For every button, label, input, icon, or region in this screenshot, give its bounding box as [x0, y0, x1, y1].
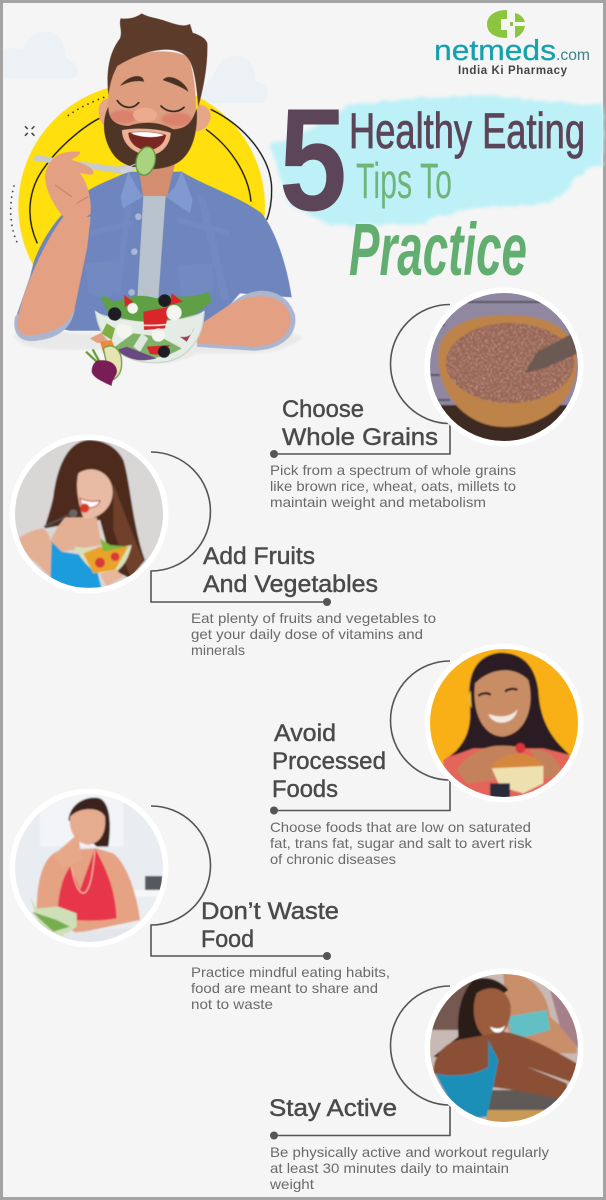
heading [201, 898, 339, 953]
description [270, 462, 516, 510]
description: get your daily dose of vitamins and [191, 626, 423, 642]
description [191, 964, 390, 1012]
ears [99, 98, 211, 132]
hair [108, 13, 207, 107]
description: Choose foods that are low on saturated [270, 819, 531, 835]
head [99, 13, 211, 169]
title block [270, 78, 603, 291]
connector [270, 304, 450, 458]
neck [137, 157, 177, 198]
description: of chronic diseases [270, 851, 396, 867]
photo: woman with fruit bowl [10, 434, 170, 594]
t-shirt [137, 196, 166, 298]
heading: Food [201, 926, 254, 953]
heading [272, 720, 386, 803]
jacket pockets [85, 193, 230, 302]
logo .com: .com [556, 47, 590, 64]
buttons [128, 213, 142, 296]
heading: Choose [282, 396, 364, 423]
illustration: man eating salad [3, 13, 303, 386]
panel: whole grains [270, 288, 585, 510]
heading [282, 396, 438, 451]
description: food are meant to share and [191, 980, 378, 996]
panel: fruits and vegetables [10, 434, 436, 658]
description: Eat plenty of fruits and vegetables to [191, 610, 436, 626]
heading: Foods [272, 776, 338, 803]
decorative dots [11, 97, 104, 245]
closed eyes [117, 101, 184, 111]
description [270, 819, 533, 867]
hand holding fork [33, 151, 147, 220]
nose [133, 108, 157, 122]
heading: Whole Grains [282, 424, 438, 451]
olives [108, 294, 171, 358]
logo wordmark: netmeds [434, 35, 556, 67]
face [107, 51, 196, 160]
table shadow [13, 330, 303, 363]
description: like brown rice, wheat, oats, millets to [270, 478, 516, 494]
title line: Tips To: Tips To [356, 153, 452, 209]
heading: And Vegetables [203, 571, 378, 598]
photo: woman thinking at table [10, 788, 170, 948]
logo: netmeds [434, 10, 590, 77]
panel: don't waste food [10, 788, 390, 1012]
description: maintain weight and metabolism [270, 494, 486, 510]
beard [104, 107, 197, 169]
panel: stay active [269, 968, 584, 1192]
photo: woman exercising [423, 968, 584, 1128]
bowl rim [96, 312, 204, 325]
mouth [122, 129, 171, 155]
description: not to waste [191, 996, 273, 1012]
left arm with sleeve [14, 300, 75, 341]
heading: Don’t Waste [201, 898, 339, 925]
description [269, 1144, 549, 1192]
connector [270, 986, 450, 1140]
description: weight [269, 1176, 314, 1192]
photo: girl with burger [423, 643, 584, 802]
connector [151, 452, 331, 606]
description: Practice mindful eating habits, [191, 964, 390, 980]
heading: Stay Active [269, 1095, 397, 1122]
hand behind bowl [90, 332, 110, 343]
jacket [15, 172, 292, 331]
black ring arcs [30, 109, 272, 243]
right arm with sleeve [197, 291, 295, 351]
heading [203, 543, 378, 598]
description: Pick from a spectrum of whole grains [270, 462, 516, 478]
big number 5: 5 [279, 78, 347, 241]
salad bowl [90, 292, 212, 363]
connector [151, 806, 331, 960]
description: at least 30 minutes daily to maintain [270, 1160, 509, 1176]
bowl glass [96, 312, 204, 363]
heading: Add Fruits [203, 543, 315, 570]
description: Be physically active and workout regularly [270, 1144, 549, 1160]
photo: bowl of grains [424, 288, 585, 446]
cheek blush [109, 110, 192, 126]
cheese [116, 303, 182, 352]
yellow sun circle [18, 83, 265, 330]
description: minerals [191, 642, 245, 658]
eyebrows [120, 76, 188, 92]
heading: Avoid [274, 720, 336, 747]
collar [121, 171, 193, 213]
heading: Processed [272, 748, 386, 775]
logo icon [487, 10, 525, 38]
icon: left cloud [3, 31, 77, 78]
vegetables: carrot and beetroot [86, 323, 122, 386]
panel: processed foods [270, 643, 584, 867]
cyan brush splash [270, 95, 603, 225]
connector [270, 661, 450, 814]
tomatoes [124, 293, 183, 355]
logo tagline: India Ki Pharmacy [458, 65, 568, 77]
cucumber slice [133, 145, 158, 177]
fork tines [120, 159, 147, 173]
description: fat, trans fat, sugar and salt to avert risk [270, 835, 533, 851]
description [191, 610, 436, 658]
icon: right cloud [202, 56, 268, 103]
salad leaves [100, 292, 212, 322]
